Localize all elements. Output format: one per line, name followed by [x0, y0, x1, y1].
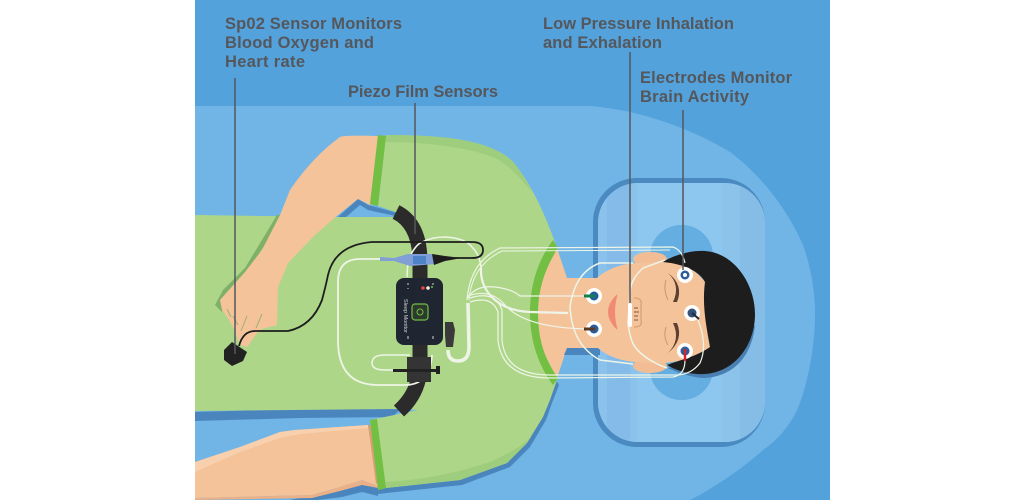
electrode: red [677, 343, 693, 361]
arch over device [407, 237, 481, 277]
eyelids [665, 280, 668, 345]
sleeve cuff [370, 135, 386, 206]
inner cannula [628, 260, 667, 368]
ear bottom [633, 359, 667, 373]
short loop beneath device [372, 355, 410, 370]
label: piezo film sensors: Piezo Film Sensors [348, 83, 498, 101]
mattress [195, 106, 815, 500]
face [582, 262, 710, 363]
mouth [608, 295, 617, 329]
pointer: SpO2 [234, 78, 236, 354]
pillow [593, 178, 765, 447]
brown electrode lead [468, 293, 588, 329]
label: SpO2 sensor: Blood Oxygen and [225, 34, 374, 52]
label: SpO2 sensor [225, 15, 402, 71]
bottom long electrode lead [470, 296, 704, 375]
lower sleeve cuff [370, 419, 386, 490]
infographic: sleep monitor on a patient [195, 0, 830, 500]
arm shadow on shirt [215, 215, 285, 312]
blue gap at elbow [338, 199, 415, 217]
eyebrow top [668, 273, 679, 302]
electrode: brown [584, 321, 602, 337]
electrode: middle [684, 305, 700, 321]
white tubing [338, 237, 704, 385]
arm and hand [220, 136, 378, 347]
lower arm shadow [290, 484, 378, 500]
electrode: top [677, 267, 693, 283]
lower arm [195, 425, 379, 500]
neck shadow [564, 348, 600, 355]
nostrils [634, 308, 639, 320]
second top lead [469, 250, 670, 300]
pointer: low pressure [629, 52, 631, 303]
status lights [421, 286, 425, 290]
hair shadow [668, 325, 755, 378]
electrode: green [584, 288, 602, 304]
lower clasp [393, 357, 440, 382]
cannula nosepiece [628, 303, 632, 327]
oxygen tube [448, 303, 469, 361]
label: electrodes: Electrodes Monitor [640, 69, 793, 87]
shirt: shoulder band [385, 135, 532, 192]
ear top [633, 252, 667, 266]
label: SpO2 sensor: Sp02 Sensor Monitors [225, 15, 402, 33]
side connector [445, 322, 455, 347]
green electrode lead [468, 287, 588, 298]
pointer: piezo [414, 103, 416, 234]
black sensor cable [239, 242, 483, 346]
hair [663, 251, 755, 374]
shirt: torso [195, 135, 557, 490]
finger lines [227, 309, 262, 331]
shirt: hem band [385, 437, 531, 488]
arm edge tint [370, 136, 380, 205]
second bottom lead [470, 300, 685, 378]
label: electrodes [640, 69, 793, 106]
panel: background [195, 0, 830, 500]
power button [412, 304, 428, 320]
device label: Sleep Monitor [402, 299, 408, 333]
label: electrodes: Brain Activity [640, 88, 750, 106]
strap [396, 212, 420, 411]
eyebrow bottom [668, 323, 679, 353]
torso shadow [195, 408, 402, 421]
label: low pressure [543, 15, 734, 52]
cannula tube to neck [481, 268, 568, 313]
lower shirt shadow [378, 380, 559, 494]
finger clip [224, 342, 247, 366]
top long electrode lead [467, 247, 685, 300]
label: low pressure: and Exhalation [543, 34, 662, 52]
outer cannula [570, 263, 633, 364]
long loop left of device [338, 259, 432, 385]
label: low pressure: Low Pressure Inhalation [543, 15, 734, 33]
device tabs [408, 283, 433, 339]
pointer: electrodes [682, 110, 684, 270]
blue connector [380, 254, 462, 266]
neck [538, 248, 600, 378]
monitor device [396, 278, 443, 345]
label: SpO2 sensor: Heart rate [225, 53, 305, 71]
nose [634, 298, 641, 327]
shirt collar [530, 240, 558, 385]
head [582, 251, 755, 378]
